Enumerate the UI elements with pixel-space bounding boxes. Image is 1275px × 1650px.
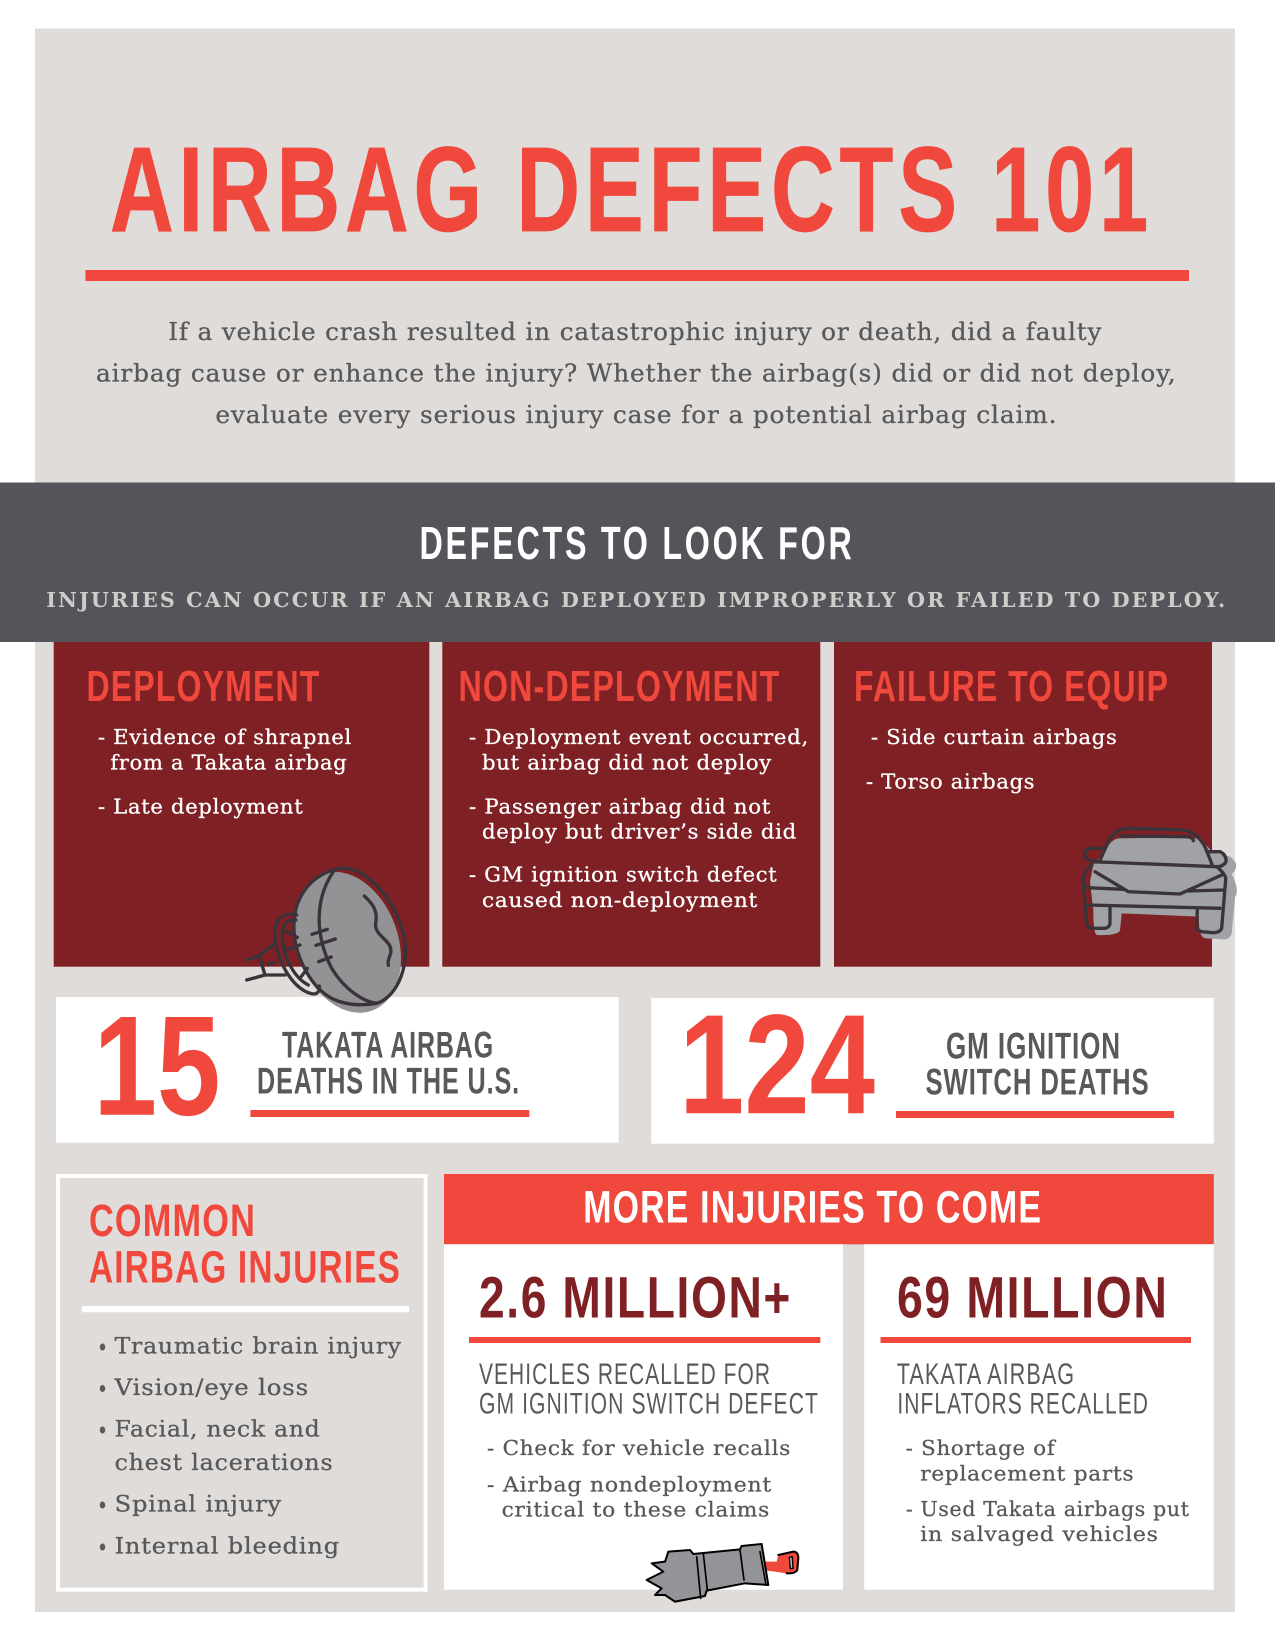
band heading: DEFECTS TO LOOK FOR	[420, 517, 854, 569]
list: injuries: Spinal injury	[115, 1493, 282, 1518]
list: recalls: critical to these claims	[502, 1497, 770, 1521]
list: recalls: - Check for vehicle recalls	[487, 1436, 791, 1460]
description	[479, 1358, 819, 1420]
list: non-deployment: - Deployment event occurred,	[469, 725, 809, 749]
heading: non-deployment: NON-DEPLOYMENT	[458, 662, 780, 711]
list: non-deployment: - Passenger airbag did not	[469, 794, 771, 818]
intro paragraph: evaluate every serious injury case for a potential airbag claim.	[215, 401, 1057, 429]
stat label	[257, 1025, 520, 1102]
description: GM IGNITION SWITCH DEFECT	[479, 1387, 819, 1420]
stat label: SWITCH DEATHS	[926, 1062, 1150, 1103]
stat label	[926, 1026, 1150, 1103]
banner: more injuries to come: MORE INJURIES TO COME	[583, 1181, 1042, 1232]
description: VEHICLES RECALLED FOR	[479, 1358, 771, 1391]
list: deployment: - Evidence of shrapnel	[98, 725, 352, 749]
stat: 124 GM ignition switch deaths	[651, 985, 1214, 1144]
list: non-deployment: caused non-deployment	[482, 888, 758, 912]
list: recalls: - Airbag nondeployment	[487, 1472, 772, 1496]
stat label: DEATHS IN THE U.S.	[257, 1061, 520, 1102]
heading: common airbag injuries	[89, 1195, 401, 1292]
list: inflators: - Shortage of	[906, 1436, 1056, 1460]
description	[897, 1358, 1149, 1420]
list: deployment: from a Takata airbag	[110, 750, 347, 774]
list: injuries	[100, 1334, 402, 1559]
heading: deployment: DEPLOYMENT	[86, 662, 320, 711]
icon: airbag inflator	[647, 1544, 798, 1602]
list: inflators: - Used Takata airbags put	[906, 1497, 1190, 1521]
title underline	[86, 270, 1189, 281]
banner: more injuries to come	[444, 1174, 1214, 1244]
list: inflators	[906, 1436, 1190, 1546]
list: inflators: in salvaged vehicles	[920, 1522, 1159, 1546]
header section	[86, 121, 1189, 429]
list: failure to equip	[866, 725, 1118, 794]
panel: 69 million inflators	[864, 1244, 1214, 1590]
stat label: TAKATA AIRBAG	[282, 1025, 494, 1066]
stat label: GM IGNITION	[946, 1026, 1121, 1067]
icon: car	[1083, 828, 1237, 940]
list: inflators: replacement parts	[920, 1462, 1134, 1486]
panel: deployment	[54, 642, 429, 967]
list: non-deployment: - GM ignition switch defect	[469, 863, 777, 887]
list: failure to equip: - Side curtain airbags	[871, 725, 1118, 749]
panel: non-deployment	[442, 642, 820, 967]
list: injuries: chest lacerations	[115, 1451, 333, 1476]
list: deployment: - Late deployment	[98, 794, 303, 818]
heading: common airbag injuries: COMMON	[89, 1195, 256, 1246]
list: injuries: Traumatic brain injury	[115, 1334, 402, 1359]
description: TAKATA AIRBAG	[897, 1358, 1075, 1391]
heading: common airbag injuries: AIRBAG INJURIES	[89, 1241, 401, 1292]
icon: airbag	[247, 857, 420, 1028]
intro paragraph: If a vehicle crash resulted in catastrophic injury or death, did a faulty	[168, 318, 1102, 346]
list: injuries: Vision/eye loss	[113, 1376, 309, 1401]
stat: 15 Takata airbag deaths	[56, 987, 619, 1146]
number: 15: 15	[94, 987, 220, 1146]
list: injuries: Internal bleeding	[115, 1534, 340, 1559]
description: INFLATORS RECALLED	[897, 1387, 1149, 1420]
intro paragraph: airbag cause or enhance the injury? Whether the airbag(s) did or did not deploy,	[96, 360, 1176, 388]
list: non-deployment	[469, 725, 809, 912]
number: 2.6 million+: 2.6 MILLION+	[479, 1266, 792, 1331]
panel: common airbag injuries	[58, 1176, 426, 1590]
list: failure to equip: - Torso airbags	[866, 770, 1035, 794]
list: non-deployment: but airbag did not deploy	[482, 750, 772, 774]
band: defects to look for	[0, 482, 1275, 642]
panel: 2.6 million vehicles	[444, 1244, 843, 1590]
number: 69 million: 69 MILLION	[897, 1266, 1168, 1331]
intro paragraph	[96, 318, 1176, 429]
list: non-deployment: deploy but driver’s side did	[482, 820, 797, 844]
band subheading: INJURIES CAN OCCUR IF AN AIRBAG DEPLOYED IMPROPERLY OR FAILED TO DEPLOY.	[46, 588, 1227, 612]
panel: failure to equip	[834, 642, 1212, 967]
list: injuries: Facial, neck and	[115, 1418, 320, 1443]
list: deployment	[98, 725, 352, 818]
number: 124: 124	[679, 985, 875, 1144]
list: recalls	[487, 1436, 791, 1521]
